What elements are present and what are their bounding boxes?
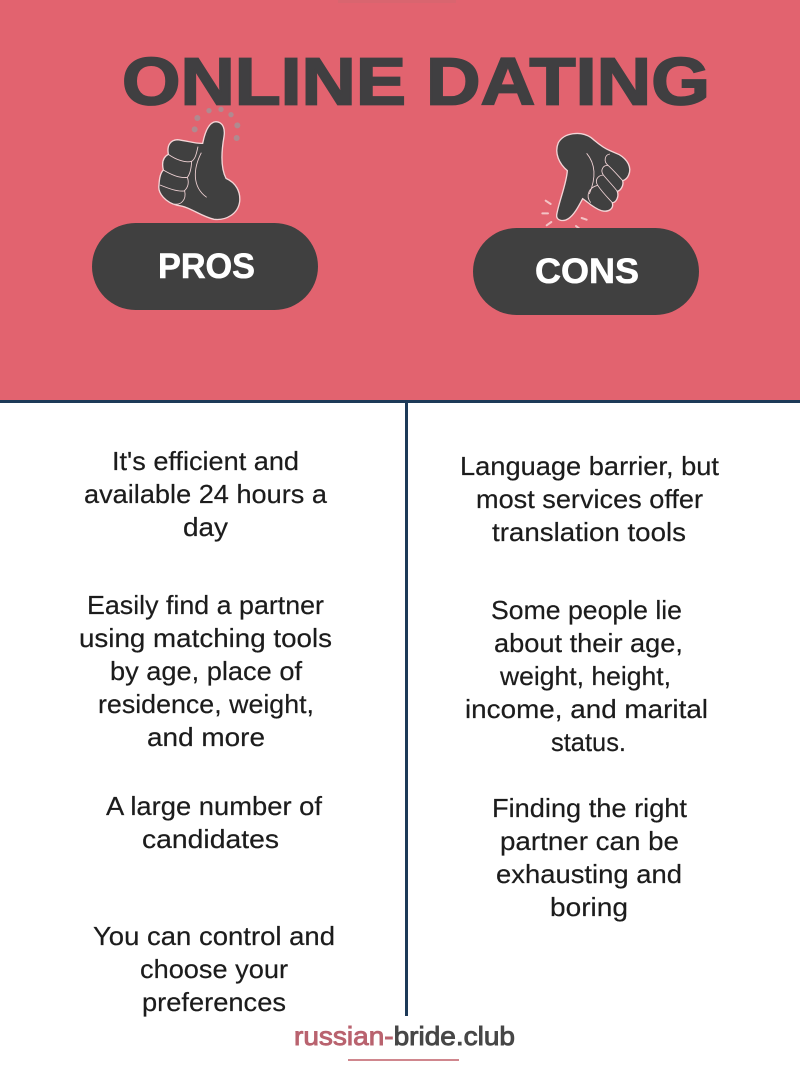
cons item 3: Finding the right: [492, 793, 688, 823]
cons item 3: [492, 793, 688, 922]
logo: russian- bride.club: [294, 1021, 515, 1051]
pros item 1: day: [183, 512, 228, 542]
cons pill: [473, 228, 699, 315]
pros item 1: available 24 hours a: [84, 479, 328, 509]
cons item 1: Language barrier, but: [460, 451, 720, 481]
cons item 1: translation tools: [492, 517, 686, 547]
cons item 1: most services offer: [476, 484, 703, 514]
title: ONLINE: [122, 44, 406, 120]
divider lines: [0, 400, 800, 1016]
pros item 3: [106, 791, 323, 854]
pros pill: [92, 223, 318, 310]
icon: thumbs down: [542, 133, 630, 229]
pros item 2: using matching tools: [79, 623, 332, 653]
cons item 3: boring: [550, 892, 628, 922]
pros item 2: by age, place of: [110, 656, 303, 686]
pros item 3: A large number of: [106, 791, 323, 821]
pros item 1: [84, 446, 328, 542]
pros item 3: candidates: [142, 824, 279, 854]
cons item 2: status.: [551, 727, 626, 757]
pros item 4: preferences: [142, 987, 286, 1017]
pros pill: PROS: [158, 247, 255, 286]
cons item 2: about their age,: [494, 628, 683, 658]
pros item 1: It's efficient and: [112, 446, 299, 476]
cons item 3: partner can be: [500, 826, 679, 856]
header panel: [0, 0, 800, 400]
cons item 2: income, and marital: [465, 694, 708, 724]
pros item 4: You can control and: [93, 921, 335, 951]
icon: thumbs up: [159, 107, 240, 220]
cons pill: CONS: [535, 252, 639, 291]
pros item 2: [79, 590, 332, 752]
pros item 2: Easily find a partner: [87, 590, 324, 620]
cons item 3: exhausting and: [496, 859, 682, 889]
cons item 2: [465, 595, 708, 757]
title: [122, 44, 710, 120]
cons item 2: weight, height,: [499, 661, 671, 691]
cons item 2: Some people lie: [491, 595, 682, 625]
cons item 1: [460, 451, 720, 547]
pros item 2: residence, weight,: [98, 689, 314, 719]
pros item 4: choose your: [140, 954, 288, 984]
pros item 4: [93, 921, 335, 1017]
title: DATING: [426, 44, 710, 120]
pros item 2: and more: [147, 722, 265, 752]
